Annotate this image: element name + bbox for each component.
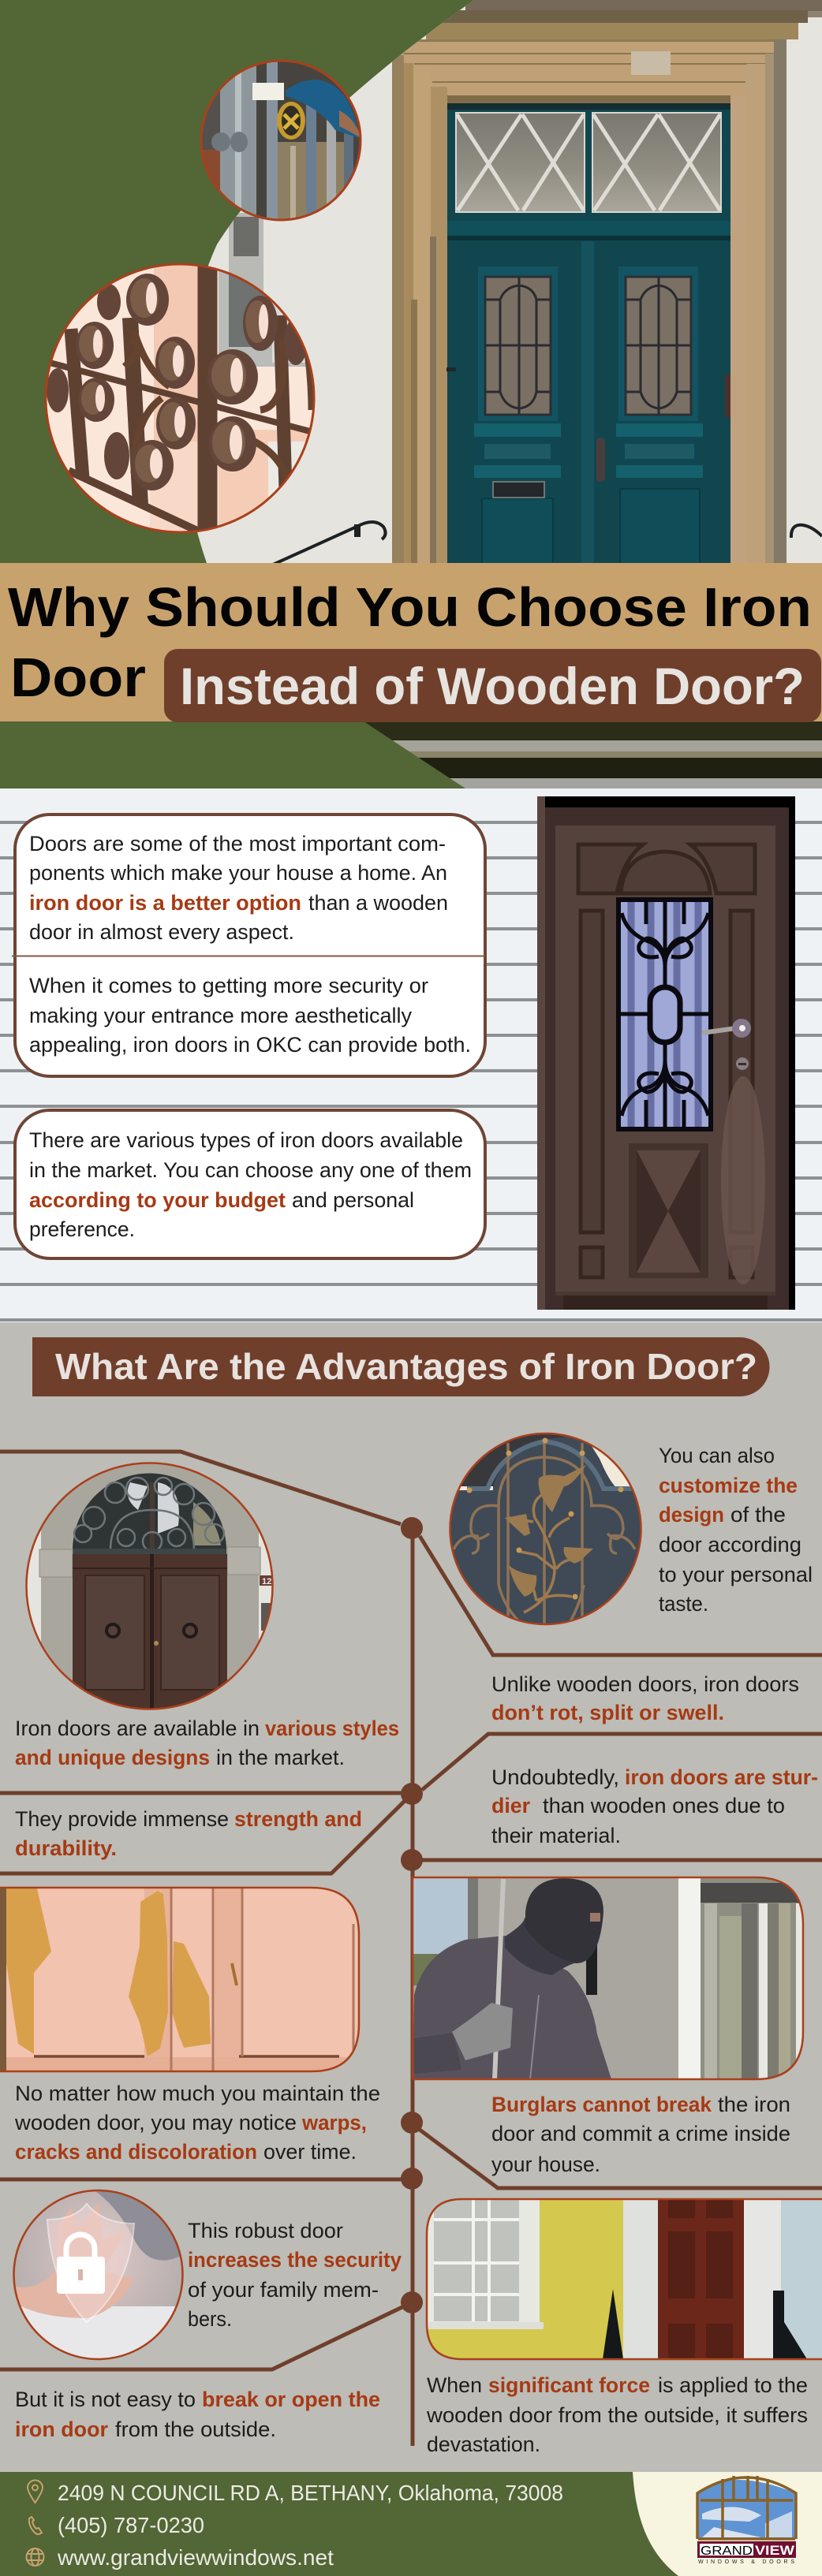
text: burglars <box>491 2093 790 2176</box>
logo: Grand View Windows & Doors: GRAND <box>701 2544 753 2558</box>
door rails and lower panels <box>446 367 730 569</box>
stone frame <box>392 39 774 95</box>
text box: intro <box>12 815 485 1076</box>
text: customize the design: to your personal <box>659 1563 813 1586</box>
text: warps and cracks: No matter how much you maintain the <box>15 2082 380 2105</box>
connector lines and nodes <box>0 1452 822 2446</box>
text box: types of iron doors: according to your budget <box>29 1188 286 1212</box>
text: burglars: your house. <box>491 2153 600 2176</box>
hero photo: teal double door <box>181 0 822 569</box>
text box: types of iron doors: and personal <box>292 1188 414 1212</box>
photo: arched wooden door: 12 <box>262 1577 271 1586</box>
text: break or open: But it is not easy to <box>15 2388 196 2411</box>
logo: Grand View Windows & Doors: WINDOWS & DOORS <box>698 2559 794 2565</box>
text box: types of iron doors <box>15 1110 485 1258</box>
text: strength <box>15 1807 362 1860</box>
text box: intro: appealing, iron doors in OKC can provide both. <box>29 1033 471 1057</box>
text: burglars: Burglars cannot break <box>491 2093 712 2116</box>
text: don't rot: Unlike wooden doors, iron doors <box>491 1672 799 1696</box>
text: significant force: devastation. <box>427 2432 540 2456</box>
icon: location pin <box>28 2481 43 2503</box>
door lower panel <box>629 1143 708 1278</box>
illustration: brown iron door <box>537 796 795 1310</box>
text: warps and cracks: warps, <box>301 2111 367 2134</box>
logo: Grand View Windows & Doors <box>697 2476 796 2565</box>
cornice <box>465 0 822 11</box>
panel: hero <box>0 0 822 788</box>
title line 2: Door <box>10 647 146 708</box>
text: increases the security: bers. <box>188 2307 232 2331</box>
text: significant force: is applied to the <box>658 2373 808 2397</box>
photo circle: wrought iron scrollwork <box>46 264 316 534</box>
title banner <box>0 563 822 722</box>
text box: intro: Doors are some of the most important com- <box>29 832 446 856</box>
text box: types of iron doors: There are various types of iron doors available <box>29 1128 463 1152</box>
text: significant force: When <box>427 2373 482 2397</box>
text: customize the design: taste. <box>659 1592 708 1616</box>
text: various styles: Iron doors are available in <box>15 1717 260 1740</box>
text: customize the design <box>659 1444 813 1616</box>
text: customize the design: of the <box>730 1503 786 1527</box>
door leaf <box>447 103 730 569</box>
section heading: What Are the Advantages of Iron Door? <box>55 1346 757 1387</box>
text: sturdier <box>491 1765 818 1847</box>
transom windows <box>456 113 721 212</box>
panel: advantages <box>0 1322 822 2472</box>
door side panels <box>581 911 603 1232</box>
text box: types of iron doors: preference. <box>29 1217 135 1241</box>
door handle and lock <box>702 1019 765 1284</box>
title line 1: Why Should You Choose Iron <box>8 576 812 638</box>
text: strength: They provide immense <box>15 1807 229 1831</box>
photo: red door and yellow wall <box>427 2199 822 2359</box>
panel: footer <box>0 2472 822 2576</box>
section heading <box>32 1337 770 1396</box>
title pill: Instead of Wooden Door? <box>180 657 805 715</box>
text: sturdier: dier <box>491 1794 530 1817</box>
text: various styles: in the market. <box>216 1746 345 1769</box>
iron ribbons <box>125 327 312 481</box>
text: customize the design: You can also <box>659 1444 775 1467</box>
text box: types of iron doors: in the market. You can choose any one of them <box>29 1158 472 1182</box>
text box: intro: iron door is a better option <box>29 891 301 915</box>
panel: introduction on siding <box>0 788 822 1322</box>
text box: intro: door in almost every aspect. <box>29 920 294 944</box>
website: www.grandviewwindows.net <box>57 2545 334 2570</box>
text box: intro: making your entrance more aesthetically <box>29 1004 413 1027</box>
text: customize the design: design <box>659 1503 724 1527</box>
icon: globe <box>27 2548 44 2566</box>
icon: phone <box>29 2517 42 2534</box>
handrail left <box>273 522 386 565</box>
phone number: (405) 787-0230 <box>58 2513 204 2537</box>
photo: peeling wooden door <box>0 1888 360 2072</box>
text box: intro: When it comes to getting more security or <box>29 974 428 997</box>
photo circle: painting iron gate <box>200 61 361 222</box>
text: sturdier: iron doors are stur- <box>625 1765 818 1789</box>
photo: burglar with crowbar <box>413 1877 803 2079</box>
handrail right <box>791 525 822 538</box>
text: strength: strength and <box>234 1807 362 1831</box>
door top panels <box>578 844 755 893</box>
text: significant force: significant force <box>488 2373 650 2397</box>
text: increases the security: increases the security <box>188 2248 402 2272</box>
text: break or open <box>15 2388 380 2441</box>
text: don't rot <box>491 1672 799 1724</box>
text: various styles: various styles <box>265 1717 399 1740</box>
door glass panels <box>478 267 698 421</box>
text: break or open: iron door <box>15 2418 108 2441</box>
text: warps and cracks: over time. <box>263 2140 357 2164</box>
text: don't rot: don’t rot, split or swell. <box>491 1701 724 1724</box>
text: warps and cracks: cracks and discoloration <box>15 2140 257 2164</box>
text: increases the security: This robust door <box>188 2219 343 2242</box>
text box: intro: ponents which make your house a home. An <box>29 861 447 885</box>
address: 2409 N COUNCIL RD A, BETHANY, Oklahoma, 73008 <box>58 2481 563 2505</box>
logo: Grand View Windows & Doors: VIEW <box>755 2543 795 2558</box>
text: customize the design: customize the <box>659 1474 798 1497</box>
iron bars <box>50 264 310 534</box>
text: warps and cracks <box>14 2082 380 2164</box>
iron rings <box>47 274 308 490</box>
text: strength: durability. <box>15 1836 117 1860</box>
text: significant force <box>426 2373 808 2456</box>
photo: security lock and shield <box>14 2190 183 2359</box>
text: increases the security: of your family mem- <box>188 2278 379 2302</box>
text: sturdier: than wooden ones due to <box>543 1794 785 1817</box>
text: burglars: door and commit a crime inside <box>491 2122 790 2145</box>
text: various styles: and unique designs <box>15 1746 210 1769</box>
text: break or open: from the outside. <box>115 2418 276 2441</box>
text: significant force: wooden door from the outside, it suffers <box>426 2403 808 2427</box>
steps below banner <box>363 721 822 788</box>
photo: arched wooden door <box>26 1463 274 1710</box>
text: increases the security <box>188 2219 402 2331</box>
text: break or open: break or open the <box>202 2388 380 2411</box>
text: burglars: the iron <box>718 2093 790 2116</box>
text: various styles <box>15 1717 399 1769</box>
photo: bronze leaf iron panel <box>450 1433 642 1626</box>
text: warps and cracks: wooden door, you may notice <box>14 2111 297 2134</box>
text box: intro: than a wooden <box>308 891 448 915</box>
text: customize the design: door according <box>659 1533 801 1556</box>
door glass with iron grille <box>618 900 711 1129</box>
text: sturdier: Undoubtedly, <box>491 1765 619 1789</box>
text: sturdier: their material. <box>491 1824 621 1847</box>
